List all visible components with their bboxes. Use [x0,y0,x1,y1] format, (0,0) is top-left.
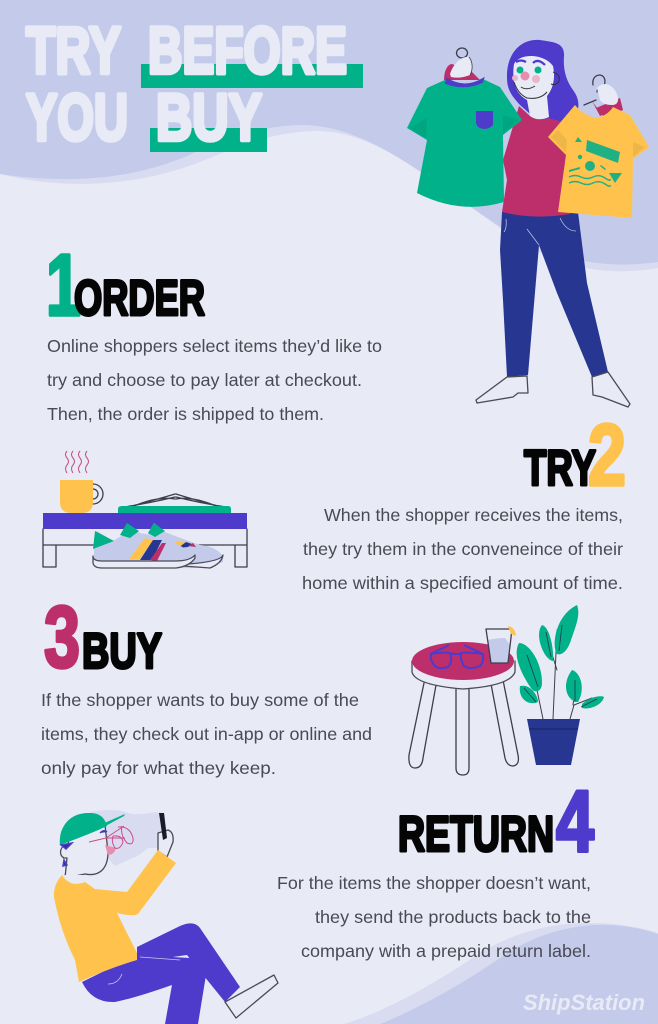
step 2 text line 2: they try them in the conveneince of their [303,539,623,559]
stool top [412,661,515,689]
step 3 text: If the shopper wants to buy some of the [41,690,359,710]
neck [62,875,85,885]
heading: order: ORDER [74,270,205,326]
number 4: 4 [556,773,594,870]
heading: buy: BUY [82,623,162,679]
front leg [82,955,206,1024]
back leg [137,923,240,1002]
heading: return: RETURN [398,806,554,862]
leaves [517,605,604,708]
stool legs [409,680,518,775]
step 1: order [46,237,382,424]
bottom background wave [344,923,658,1024]
step 3: buy [41,589,372,778]
step 2: try [302,407,626,593]
pot [527,719,580,765]
title [26,13,363,154]
mug [60,480,103,513]
glasses [431,645,483,668]
yellow sweater [54,850,176,982]
left hanger and hand [444,48,480,80]
step 1 text: Online shoppers select items they’d like to [47,336,382,356]
illustration: shelf with mug, book and shoes [43,451,247,568]
step 1 text line 3: Then, the order is shipped to them. [47,404,324,424]
illustration: stool with glasses and drink [409,626,518,775]
step 4 text line 2: they send the products back to the [315,907,591,927]
cap [60,813,125,845]
eye and hair [61,831,107,866]
neck and face [513,56,554,119]
step 3 text line 3: only pay for what they keep. [41,758,276,778]
hair [507,40,578,128]
title word: buy: BUY [156,80,262,154]
illustration: woman holding shirts [407,40,649,407]
right hanger and hand [584,75,623,118]
green t-shirt [407,79,522,207]
back shoe [148,523,223,568]
step 4 text: For the items the shopper doesn’t want, [277,873,591,893]
jeans [500,212,608,377]
number 2: 2 [588,407,626,504]
top background wave [0,0,658,271]
illustration: man looking at phone [54,810,278,1024]
number 1: 1 [46,237,81,334]
heading: try: TRY [524,440,596,496]
step 4 text line 3: company with a prepaid return label. [301,941,591,961]
step 4: return [277,773,594,961]
number 3: 3 [44,589,80,686]
hand and phone [158,813,173,857]
book [118,494,231,513]
phone glow [90,810,165,866]
title highlight: buy [150,128,267,152]
pocket [476,111,493,129]
shirt [502,106,575,217]
step 2 text line 3: home within a specified amount of time. [302,573,623,593]
step 3 text line 2: items, they check out in-app or online and [41,724,372,744]
title word: before: BEFORE [148,13,347,87]
steam [66,451,88,473]
face [61,825,108,878]
shoe [225,975,278,1018]
illustration: potted plant [517,605,604,765]
drink [486,626,516,663]
step 1 text line 2: try and choose to pay later at checkout. [47,370,362,390]
title word: you: YOU [26,80,128,154]
face details [512,60,545,89]
title highlight: before [141,64,363,88]
swirl glasses [89,826,133,848]
front shoe [93,523,195,568]
shirt print [569,137,622,183]
step 2 text: When the shopper receives the items, [324,505,623,525]
yellow t-shirt [548,105,649,218]
shelf [43,513,247,567]
title line 1: TRY [26,13,121,87]
feet [476,372,630,407]
logo: ShipStation: ShipStation [523,990,645,1015]
